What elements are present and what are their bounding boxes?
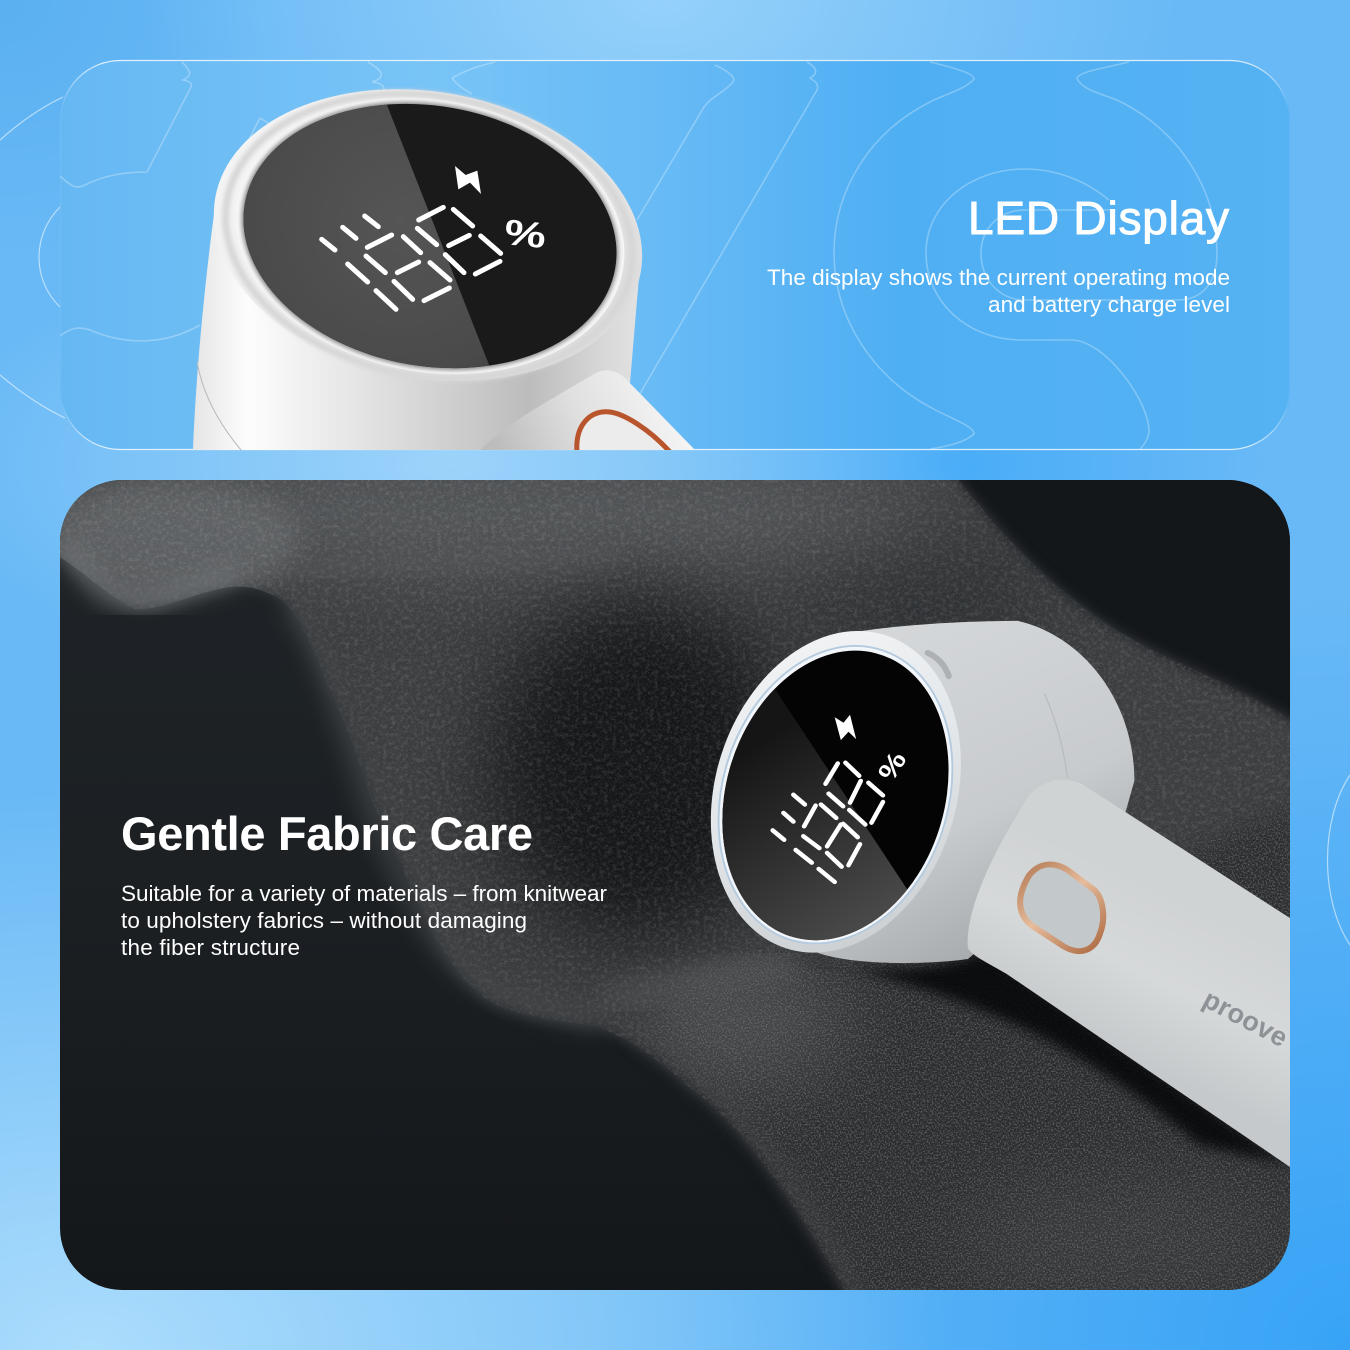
LED screen bbox=[722, 650, 949, 940]
dark backdrop corner bbox=[950, 480, 1290, 725]
panel: Gentle Fabric Care bbox=[10, 450, 1300, 1300]
device bezel bbox=[710, 631, 961, 953]
fabric shading and texture bbox=[10, 450, 1290, 1290]
text: Gentle Fabric Care description bbox=[121, 881, 608, 960]
fabric surface bbox=[40, 470, 1300, 1300]
fabric photo area bbox=[10, 450, 1300, 1300]
percent sign: % bbox=[872, 746, 913, 786]
brand name: proove bbox=[1198, 984, 1293, 1053]
text: LED Display description: The display shows the current operating mode bbox=[767, 265, 1230, 290]
fabric ridge highlights bbox=[70, 550, 620, 1022]
icon: charging bolt bbox=[455, 166, 481, 194]
device body bbox=[193, 200, 641, 450]
heading: Gentle Fabric Care: Gentle Fabric Care bbox=[121, 807, 533, 860]
device head bbox=[815, 621, 1134, 963]
lower fabric fold bbox=[646, 800, 1290, 1290]
device: lint remover bbox=[710, 620, 1290, 1167]
device button bbox=[1020, 864, 1103, 951]
heading: LED Display: LED Display bbox=[968, 192, 1229, 244]
text: LED Display description: and battery charge level bbox=[988, 292, 1230, 317]
fold highlight streak bbox=[605, 964, 800, 1000]
LED digits bbox=[322, 166, 501, 309]
panel contour lines bbox=[60, 62, 1217, 449]
icon: charging bolt bbox=[835, 715, 856, 740]
panel: LED Display bbox=[60, 57, 1290, 452]
LED screen bbox=[244, 104, 616, 368]
panel edge highlight bbox=[60, 60, 1290, 450]
device shadow bbox=[856, 954, 1286, 1168]
text: Gentle Fabric Care description: to upholstery fabrics – without damaging bbox=[121, 908, 527, 933]
text: Gentle Fabric Care description: the fiber structure bbox=[121, 935, 300, 960]
device bezel bbox=[214, 87, 642, 381]
LED digits bbox=[773, 715, 883, 882]
percent sign: % bbox=[502, 211, 548, 256]
text: LED Display description bbox=[767, 265, 1230, 317]
text: Gentle Fabric Care description: Suitable for a variety of materials – from knitwear bbox=[121, 881, 608, 906]
device: top close-up bbox=[190, 57, 695, 452]
background contour lines bbox=[0, 97, 1350, 945]
device neck and button bbox=[480, 370, 695, 452]
device handle bbox=[968, 780, 1297, 1172]
